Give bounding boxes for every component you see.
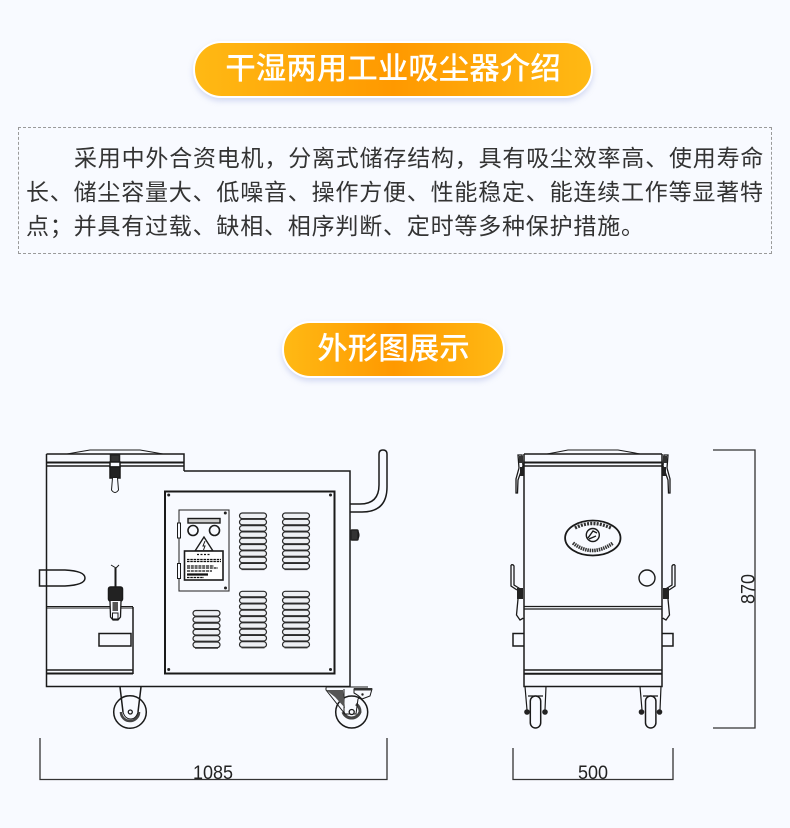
side view machine	[40, 450, 387, 728]
text block: product description: 采用中外合资电机，分离式储存结构，具有吸尘效率高、使用寿命	[74, 145, 764, 171]
dimension: height 870: 870	[737, 574, 759, 604]
fixed caster	[114, 687, 146, 728]
dimension: height 870	[713, 450, 759, 728]
text block: product description: 长、储尘容量大、低噪音、操作方便、性能稳定、能连续工作等显著特	[26, 179, 764, 205]
dimension: width 500	[513, 748, 673, 783]
dimension: length 1085	[40, 738, 387, 783]
control panel	[165, 492, 334, 674]
lower bin	[46, 606, 133, 674]
vents small	[193, 610, 220, 648]
right front caster	[639, 686, 662, 728]
heading: outline drawing: 外形图展示	[317, 332, 470, 366]
vents upper	[240, 513, 266, 569]
inspection circle	[639, 570, 655, 586]
heading: outline drawing	[282, 321, 505, 378]
lower latch	[108, 565, 122, 620]
front view machine	[511, 450, 675, 728]
front side stubs	[513, 634, 673, 646]
text block: product description	[18, 127, 772, 254]
panel screws	[167, 494, 332, 671]
side connector	[351, 530, 359, 540]
left front caster	[524, 686, 548, 728]
side handle stub	[40, 570, 85, 586]
dimension: length 1085: 1085	[193, 762, 233, 783]
swivel caster with brake	[326, 687, 372, 728]
front body	[524, 454, 662, 686]
top latches	[516, 455, 670, 493]
rear push handle	[350, 450, 387, 512]
title: product introduction	[193, 41, 593, 98]
vents lower	[240, 591, 266, 648]
lid	[46, 450, 184, 471]
body outline	[46, 454, 350, 686]
top latch	[110, 455, 120, 492]
dimension: width 500: 500	[578, 762, 608, 783]
title: product introduction: 干湿两用工业吸尘器介绍	[225, 52, 561, 86]
base plate	[46, 674, 350, 686]
logo plate	[565, 520, 620, 556]
lower latches	[511, 565, 675, 620]
electrical control box	[178, 510, 229, 591]
front lid	[524, 450, 662, 466]
text block: product description: 点；并具有过载、缺相、相序判断、定时等多种保护措施。	[26, 213, 645, 239]
